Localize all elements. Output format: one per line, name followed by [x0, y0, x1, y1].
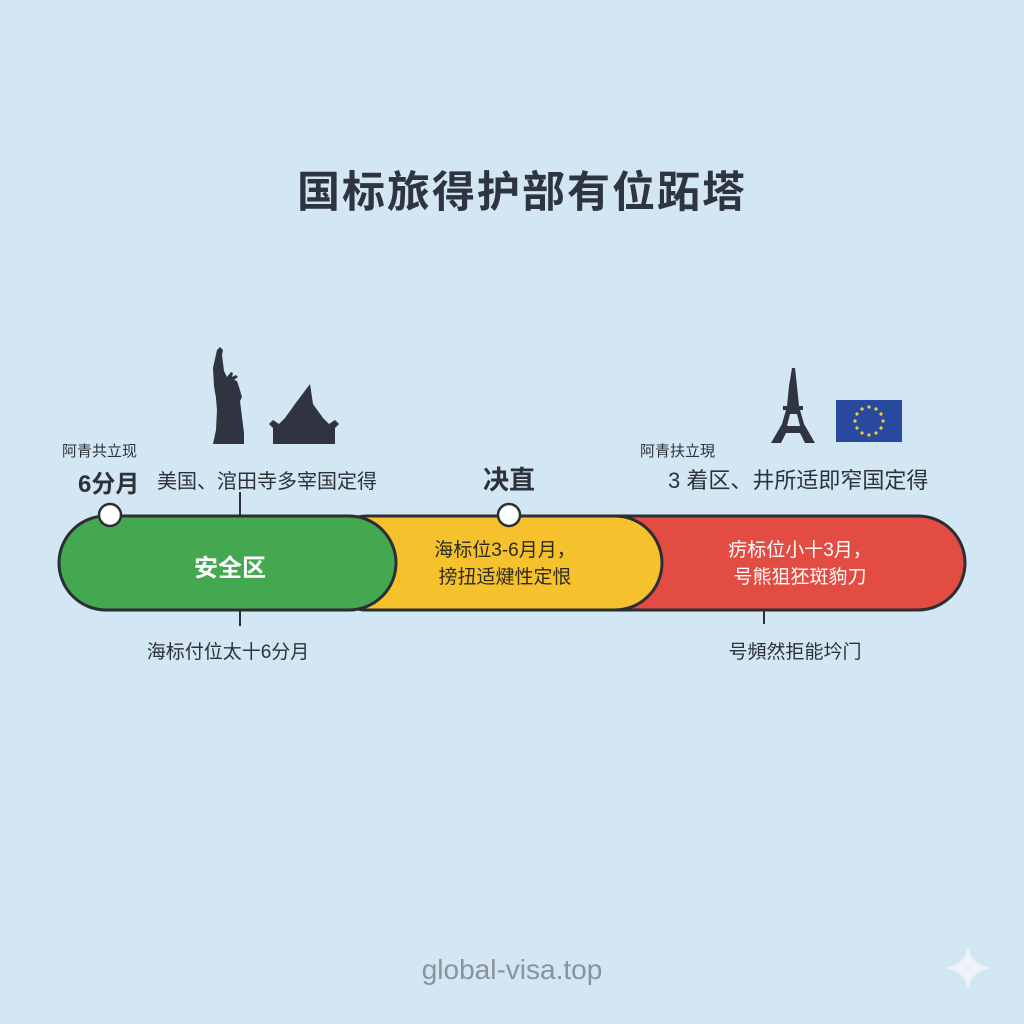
green text: 安全区 [194, 555, 266, 582]
left label small: 阿青共立现 [62, 443, 137, 460]
tick marks [240, 492, 764, 626]
title: 国标旅得护部有位跖塔 [297, 169, 747, 217]
middle label: 决直 [483, 465, 535, 495]
sparkle [946, 946, 990, 990]
right countries: 3 着区、井所适即窄国定得 [668, 468, 928, 493]
bar: yellow segment [320, 516, 662, 610]
red text: 号熊狙狉斑豿刀 [733, 567, 866, 588]
bar: red segment [560, 516, 965, 610]
red text: 疠标位小十3月， [728, 540, 872, 561]
marker circles [99, 504, 520, 526]
below red: 号頻然拒能坅门 [728, 642, 862, 663]
icon: statue of liberty [213, 347, 244, 444]
icon: EU flag [836, 400, 902, 442]
below green: 海标付位太十6分月 [147, 642, 309, 663]
footer: global-visa.top [422, 954, 602, 985]
red text [728, 540, 872, 588]
icon: temple [269, 384, 339, 444]
left label 6 months: 6分月 [78, 471, 139, 498]
yellow text: 搒扭适煡性定恨 [438, 567, 572, 588]
yellow text [434, 540, 576, 588]
right label small: 阿青扶立現 [640, 443, 715, 460]
bar: green segment [59, 516, 396, 610]
left countries: 美国、涫田寺多宰国定得 [157, 471, 377, 493]
yellow text: 海标位3-6月月， [434, 540, 576, 561]
icon: eiffel tower [771, 368, 815, 443]
